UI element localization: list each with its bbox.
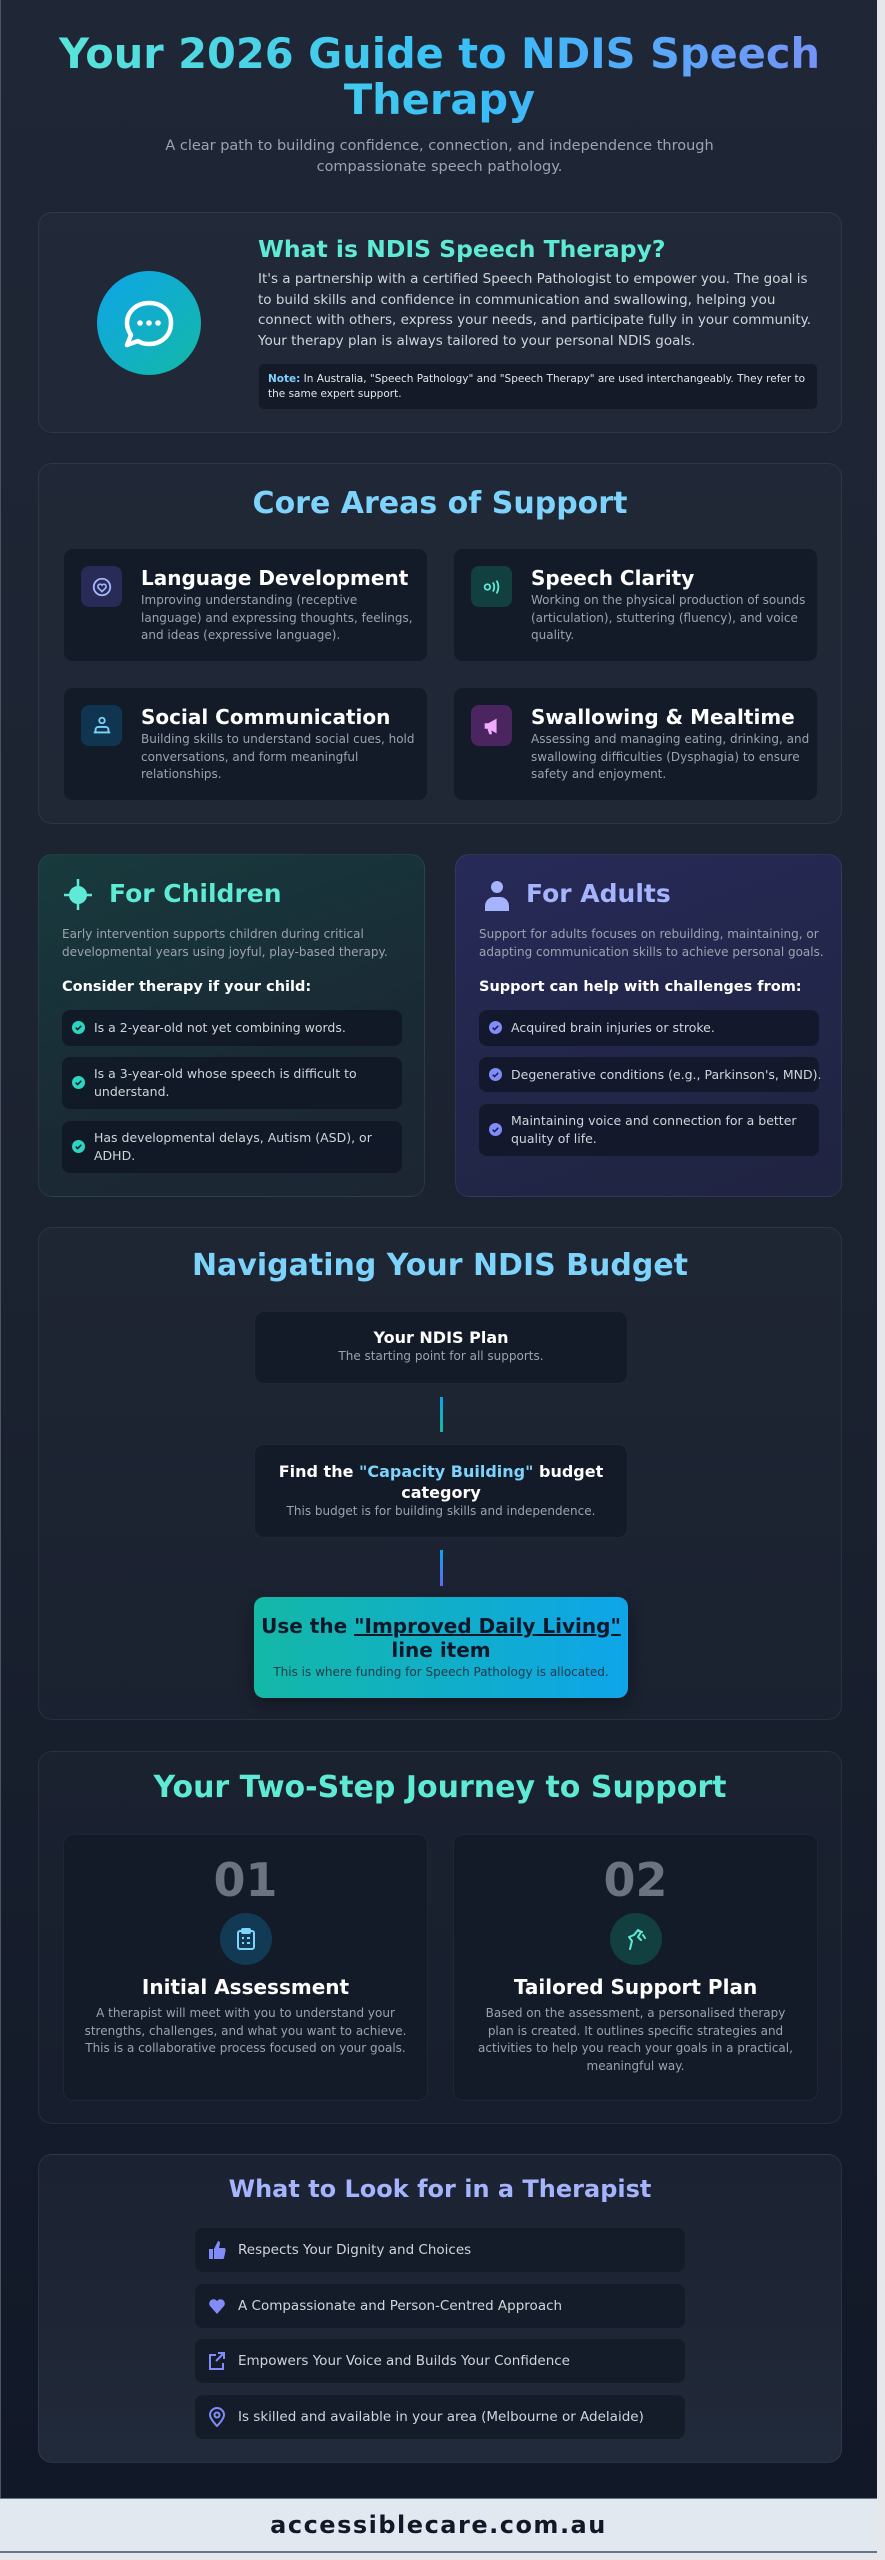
list: therapist qualities: [195, 2228, 685, 2439]
step 02: Tailored Support Plan: [514, 1975, 757, 1999]
icon: sound waves: [471, 566, 512, 607]
panel: for adults: [455, 854, 842, 1197]
heading: What to Look for in a Therapist: [229, 2175, 651, 2203]
card: language development: Language Development: [141, 566, 408, 590]
heading: Core Areas of Support: [253, 486, 627, 521]
icon: chat bubble: [97, 271, 201, 375]
subtitle: A clear path to building confidence, connection, and independence through compassionate speech pathology.: [165, 138, 714, 175]
icon: child: [64, 879, 92, 910]
step 01: 01: [213, 1853, 278, 1907]
list: child signs: [62, 1010, 402, 1173]
panel: navigating budget: [38, 1227, 842, 1720]
callout: note: [258, 363, 818, 410]
icon: people: [81, 705, 122, 746]
callout: note: Note: In Australia, "Speech Pathology" and "Speech Therapy" are used interchangeably. They refer to the same expert support.: [268, 373, 805, 400]
card: speech clarity: Speech Clarity: [531, 566, 694, 590]
arrow: connector 1: [440, 1397, 443, 1432]
list: therapist qualities: A Compassionate and Person-Centred Approach: [238, 2298, 562, 2314]
step: NDIS plan: The starting point for all supports.: [338, 1349, 544, 1363]
panel: for children: [38, 854, 425, 1197]
list: adult challenges: Maintaining voice and connection for a better quality of life.: [511, 1113, 797, 1146]
list: therapist qualities: Is skilled and available in your area (Melbourne or Adelaide): [238, 2409, 644, 2425]
arrow: connector 2: [440, 1550, 443, 1586]
icon: megaphone: [471, 705, 512, 746]
step 02: Based on the assessment, a personalised therapy plan is created. It outlines specific strategies and activities to help you reach your goals in a practical, meaningful way.: [478, 2006, 793, 2073]
heading: What is NDIS Speech Therapy?: [258, 235, 666, 263]
list: adult challenges: [479, 1010, 821, 1156]
icon: heart: [81, 566, 122, 607]
card: swallowing & mealtime: Swallowing & Mealtime: [531, 705, 795, 729]
list: therapist qualities: Respects Your Dignity and Choices: [238, 2242, 471, 2258]
step: improved daily living: Use the "Improved Daily Living": [261, 1614, 621, 1638]
step: NDIS plan: [254, 1311, 628, 1384]
footer: [0, 2498, 877, 2553]
step: capacity building: This budget is for building skills and independence.: [287, 1504, 595, 1518]
card: social communication: Building skills to understand social cues, hold conversations, and form meaningful relationships.: [141, 732, 415, 781]
text block: It's a partnership with a certified Speech Pathologist to empower you. The goal is to build skills and confidence in communication and swallowing, helping you connect with others, express your needs, and participate fully in your community. Your therapy plan is always tailored to your personal NDIS goals.: [258, 271, 811, 349]
step: NDIS plan: Your NDIS Plan: [373, 1328, 509, 1347]
heading: Navigating Your NDIS Budget: [192, 1248, 688, 1283]
icon: plan: [610, 1913, 662, 1965]
step: capacity building: [254, 1444, 628, 1538]
step 01: A therapist will meet with you to understand your strengths, challenges, and what you want to achieve. This is a collaborative process focused on your goals.: [85, 2006, 406, 2055]
title: Your 2026 Guide to NDIS Speech: [59, 29, 820, 78]
heading: For Children: [109, 879, 282, 908]
step: improved daily living: [254, 1597, 628, 1698]
panel: core areas of support: [38, 463, 842, 824]
subheading: Consider therapy if your child:: [62, 979, 311, 995]
list: adult challenges: Degenerative conditions (e.g., Parkinson's, MND).: [511, 1066, 821, 1082]
heading: Your Two-Step Journey to Support: [153, 1770, 727, 1805]
card: speech clarity: Working on the physical production of sounds (articulation), stuttering (fluency), and voice quality.: [531, 593, 805, 642]
list: child signs: Is a 2-year-old not yet combining words.: [94, 1020, 346, 1035]
icon: clipboard: [220, 1913, 272, 1965]
card: language development: [63, 548, 428, 662]
panel: what to look for: [38, 2154, 842, 2463]
step 02: [453, 1834, 818, 2101]
step 01: Initial Assessment: [142, 1975, 349, 1999]
card: speech clarity: [453, 548, 818, 662]
card: social communication: [63, 687, 428, 801]
card: language development: Improving understanding (receptive language) and expressing thoughts, feelings, and ideas (expressive language).: [141, 593, 413, 642]
title: Therapy: [344, 75, 535, 124]
card: social communication: Social Communication: [141, 705, 390, 729]
text block: Support for adults focuses on rebuilding, maintaining, or adapting communication skills to achieve personal goals.: [479, 927, 824, 959]
title: [1, 31, 878, 123]
icon: adult: [485, 881, 509, 911]
step 02: 02: [603, 1853, 668, 1907]
subheading: Support can help with challenges from:: [479, 979, 802, 995]
step: improved daily living: This is where funding for Speech Pathology is allocated.: [273, 1665, 609, 1679]
heading: For Adults: [526, 879, 671, 908]
text block: Early intervention supports children during critical developmental years using joyful, play-based therapy.: [62, 927, 388, 959]
list: adult challenges: Acquired brain injuries or stroke.: [511, 1020, 715, 1035]
panel: two-step journey: [38, 1751, 842, 2124]
step 01: [63, 1834, 428, 2101]
step: improved daily living: line item: [391, 1638, 491, 1662]
list: child signs: Is a 3-year-old whose speech is difficult to understand.: [94, 1066, 357, 1099]
list: therapist qualities: Empowers Your Voice and Builds Your Confidence: [238, 2353, 570, 2369]
panel: what is NDIS speech therapy: [38, 212, 842, 433]
card: swallowing & mealtime: Assessing and managing eating, drinking, and swallowing difficulties (Dysphagia) to ensure safety and enjoyment.: [531, 732, 809, 781]
list: child signs: Has developmental delays, Autism (ASD), or ADHD.: [94, 1130, 372, 1163]
step: capacity building: Find the "Capacity Building" budget category: [279, 1462, 603, 1502]
card: swallowing & mealtime: [453, 687, 818, 801]
footer: accessiblecare.com.au: [270, 2511, 607, 2539]
